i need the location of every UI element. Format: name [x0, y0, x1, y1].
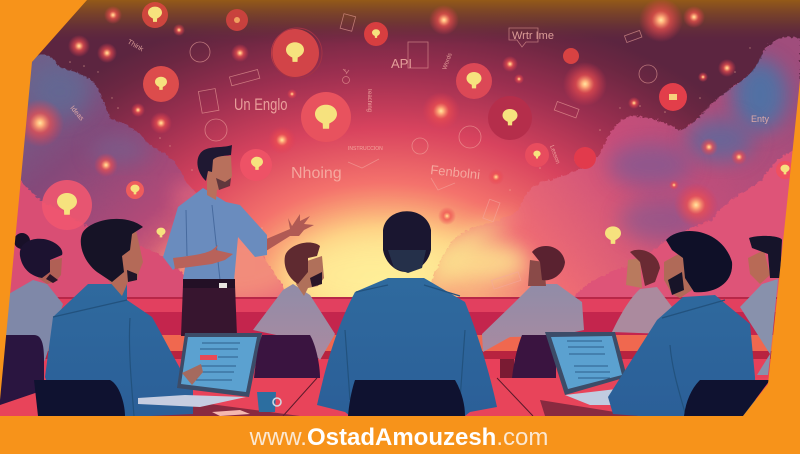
- sketched doodles and labels: API: [391, 56, 412, 71]
- sketched doodles and labels: Fenbolni: [430, 162, 481, 182]
- attendee far left with bun: [0, 233, 63, 380]
- cloud edge speckles: [69, 47, 751, 229]
- attendee right big hair: [608, 231, 756, 416]
- sketched doodles and labels: Enty: [751, 114, 770, 124]
- presenter shirt: [163, 188, 267, 281]
- sketched doodles and labels: Teaching: [366, 88, 372, 112]
- sketched doodles and labels: Lesson: [548, 145, 560, 165]
- attendee chair middle left: [254, 335, 320, 378]
- attendee back right: [612, 250, 672, 334]
- central glow: [280, 230, 490, 320]
- presenter beard: [216, 178, 231, 190]
- presenter trousers: [181, 285, 237, 336]
- back wall bands and far table: [0, 297, 800, 379]
- attendee chair middle right: [512, 335, 556, 378]
- presenter neck and face: [207, 156, 232, 200]
- attendee middle right: [482, 246, 584, 352]
- paper on table: [212, 410, 250, 416]
- presenter shirt fold lines: [186, 205, 220, 280]
- sketched doodles and labels: [68, 14, 770, 289]
- laptop right: [545, 332, 672, 405]
- attendee far right back: [740, 236, 782, 375]
- right cloud: [420, 37, 800, 300]
- presenter: [163, 145, 314, 336]
- sketched doodles and labels: Wrtr Ime: [512, 30, 554, 42]
- presenter left forearm and hand: [173, 245, 233, 269]
- attendee chair center: [348, 380, 465, 416]
- presenter belt: [183, 279, 235, 288]
- attendee center foreground: [317, 211, 497, 416]
- attendee chair right: [684, 380, 770, 416]
- presenter forearm right: [264, 214, 314, 251]
- idea bulbs in circles: [42, 2, 794, 244]
- sketched doodles and labels: Think: [126, 39, 145, 54]
- attendee middle left: [253, 243, 335, 360]
- glowing orbs: [16, 0, 747, 227]
- attendee chair far left: [0, 335, 44, 405]
- attendee left blue shirt: [45, 219, 193, 416]
- foreground table: [0, 378, 800, 418]
- presenter buckle: [219, 283, 227, 288]
- sketched doodles and labels: Words: [442, 52, 454, 71]
- left cloud: [0, 54, 300, 300]
- sketched doodles and labels: Un Englo: [234, 97, 287, 114]
- laptop left: [138, 333, 262, 407]
- attendee chair left blue: [34, 380, 125, 416]
- presenter hair: [197, 145, 232, 181]
- sketched doodles and labels: Ideas: [68, 105, 85, 123]
- sketched doodles and labels: INSTRUCCION: [348, 146, 383, 152]
- coffee cup: [257, 392, 281, 412]
- sketched doodles and labels: Nhoing: [291, 165, 342, 182]
- website address: www.OstadAmouzesh.com: [249, 424, 548, 451]
